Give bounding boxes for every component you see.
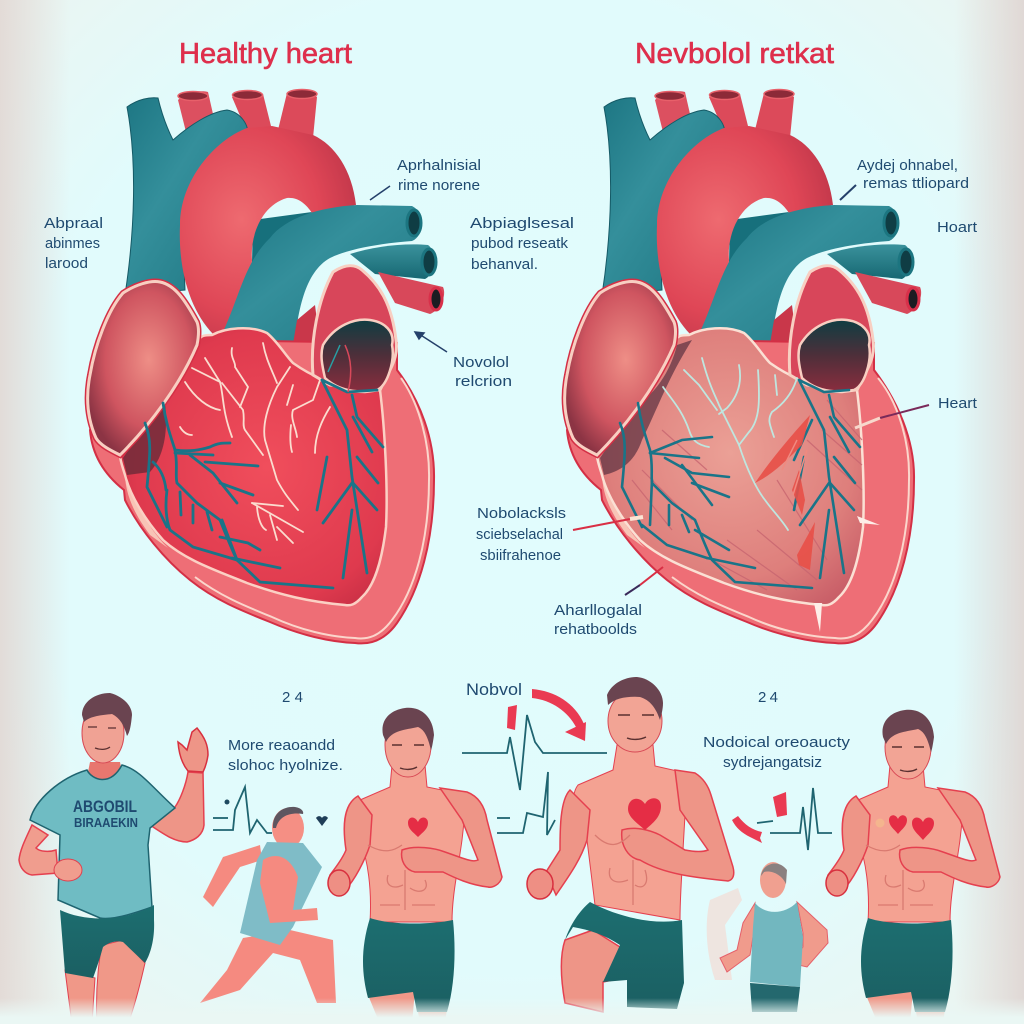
white vessels <box>180 343 330 543</box>
aorta <box>180 126 356 334</box>
arrow: red small <box>732 792 787 843</box>
blue vessels <box>145 380 383 588</box>
wall strip <box>125 473 168 548</box>
labels: left heart: relcrion <box>455 373 512 390</box>
atrium outline <box>88 282 199 455</box>
title: healthy heart: Healthy heart <box>179 38 352 70</box>
bottom fade <box>0 998 1024 1024</box>
legs <box>200 930 336 1003</box>
shirt print bottom: BIRAAEKIN <box>74 815 138 830</box>
head <box>385 713 431 777</box>
vena cava <box>602 98 725 295</box>
damage lines <box>782 440 807 495</box>
right arm <box>402 788 502 887</box>
shorts <box>60 905 154 978</box>
atrium outline <box>565 282 676 455</box>
left arm <box>330 796 372 890</box>
labels: left heart <box>44 157 574 390</box>
heart right <box>912 818 934 840</box>
cavity <box>322 320 393 391</box>
ghost figure <box>707 888 742 980</box>
raised arm <box>150 772 204 842</box>
person: shirtless man two <box>826 710 1000 1024</box>
shirt print top: ABGOBIL <box>73 797 137 816</box>
pulmonary artery <box>700 205 899 360</box>
legs <box>65 940 145 1024</box>
thigh <box>561 930 622 1012</box>
labels: right heart <box>476 157 978 638</box>
hair <box>382 708 434 750</box>
hatching <box>632 400 862 590</box>
numbers: 24 <box>282 689 303 706</box>
numbers: 24 <box>758 689 778 706</box>
labels: right heart: remas ttliopard <box>863 175 969 192</box>
labels: left heart: Abpiaglsesal <box>470 215 574 232</box>
cavity vessels <box>328 345 351 392</box>
labels: right heart: Aydej ohnabel, <box>857 157 958 174</box>
shorts <box>750 983 800 1012</box>
torso <box>573 745 695 920</box>
labels: right heart: Nobolacksls <box>477 505 566 522</box>
cavity <box>799 320 870 391</box>
right atrium <box>312 266 397 390</box>
left atrium <box>565 282 676 455</box>
labels: left heart: abinmes <box>45 235 100 252</box>
legs <box>368 990 448 1024</box>
labels: left heart: pubod reseatk <box>471 235 569 252</box>
labels: right heart: sciebselachal <box>476 526 563 543</box>
vena cava <box>125 98 248 295</box>
labels: right heart: Heart <box>938 395 978 412</box>
pulmonary vein red <box>378 272 444 314</box>
damaged ventricle <box>597 328 864 605</box>
illustration: healthy heart <box>88 90 444 643</box>
arms <box>720 902 828 972</box>
caption: right: sydrejangatsiz <box>723 754 822 771</box>
rear artery <box>729 212 789 268</box>
pale vessels <box>663 358 797 530</box>
person: central shirtless man <box>527 677 734 1012</box>
dark shading <box>600 340 692 475</box>
label pointers: left heart <box>370 186 447 352</box>
back arm <box>203 845 262 907</box>
labels: left heart: Novolol <box>453 354 509 371</box>
blue vessels <box>620 380 860 588</box>
labels: right heart: sbiifrahenoe <box>480 547 561 564</box>
person: runner in t-shirt <box>19 693 208 1024</box>
person: small man in vest <box>707 862 828 1012</box>
caption: left: slohoc hyolnize. <box>228 757 343 774</box>
red damage <box>755 415 815 570</box>
person: shirtless man one <box>328 708 502 1024</box>
hand <box>178 728 208 772</box>
person: small red runner <box>200 807 336 1003</box>
pulmonary branch two <box>350 244 434 279</box>
caption: left <box>228 737 343 774</box>
pulmonary branch two <box>827 244 911 279</box>
right arm <box>622 770 734 881</box>
wall inner line <box>195 378 429 638</box>
labels: left heart: behanval. <box>471 256 538 273</box>
arrow: red curved <box>507 689 586 741</box>
wall inner line <box>672 378 909 638</box>
vest <box>240 842 322 945</box>
top vessels <box>178 90 317 138</box>
outer wall <box>90 340 434 643</box>
head <box>82 703 124 763</box>
numbers <box>282 689 778 706</box>
caption: left: More reaoandd <box>228 737 335 754</box>
fist <box>54 859 82 881</box>
body <box>826 710 1000 1024</box>
neck <box>88 762 122 785</box>
labels: right heart: rehatboolds <box>554 621 637 638</box>
wall notches <box>814 516 880 632</box>
head <box>272 808 304 848</box>
left arm <box>546 790 590 895</box>
labels: left heart: rime norene <box>398 177 480 194</box>
labels: right heart: Aharllogalal <box>554 602 642 619</box>
torso <box>360 765 467 922</box>
top vessels <box>655 90 794 138</box>
heart <box>628 798 661 830</box>
shorts <box>565 902 684 1009</box>
aorta <box>657 126 833 334</box>
ecg dot <box>224 800 230 804</box>
labels: right heart: Hoart <box>937 219 978 236</box>
face <box>618 715 654 739</box>
abs <box>368 845 435 910</box>
hair <box>82 693 132 736</box>
caption: right <box>703 734 851 771</box>
labels: left heart: Aprhalnisial <box>397 157 481 174</box>
labels: left heart: larood <box>45 255 88 272</box>
heart left <box>889 815 907 834</box>
title: damaged heart: Nevbolol retkat <box>635 38 834 70</box>
lower arm <box>19 825 58 875</box>
hair <box>607 677 663 720</box>
head <box>760 862 786 898</box>
abs <box>595 835 647 905</box>
head <box>608 690 662 752</box>
fist <box>527 869 553 899</box>
pulmonary vein red <box>855 272 921 314</box>
face <box>392 745 424 769</box>
caption: right: Nodoical oreoaucty <box>703 734 851 751</box>
rear artery <box>252 212 312 268</box>
icon: small heart <box>316 816 328 826</box>
hair <box>761 863 787 884</box>
wall strip <box>602 473 645 548</box>
t-shirt <box>30 765 175 918</box>
left atrium <box>88 282 199 455</box>
pulmonary artery <box>223 205 422 360</box>
shorts <box>363 918 455 1012</box>
fist <box>328 870 350 896</box>
chest spot <box>876 818 884 828</box>
face <box>88 727 116 749</box>
label pointers: right heart <box>573 185 929 595</box>
illustration: damaged heart <box>565 90 921 643</box>
labels: left heart: Abpraal <box>44 215 103 232</box>
front arm <box>260 856 318 923</box>
heart <box>408 818 428 837</box>
ventricle <box>120 328 387 605</box>
caption: nobvol: Nobvol <box>466 680 522 699</box>
ecg lines <box>213 715 832 850</box>
hair <box>273 807 303 828</box>
right atrium <box>789 266 874 390</box>
vest <box>750 902 803 987</box>
dark corner <box>123 402 166 475</box>
outer wall <box>567 340 914 643</box>
